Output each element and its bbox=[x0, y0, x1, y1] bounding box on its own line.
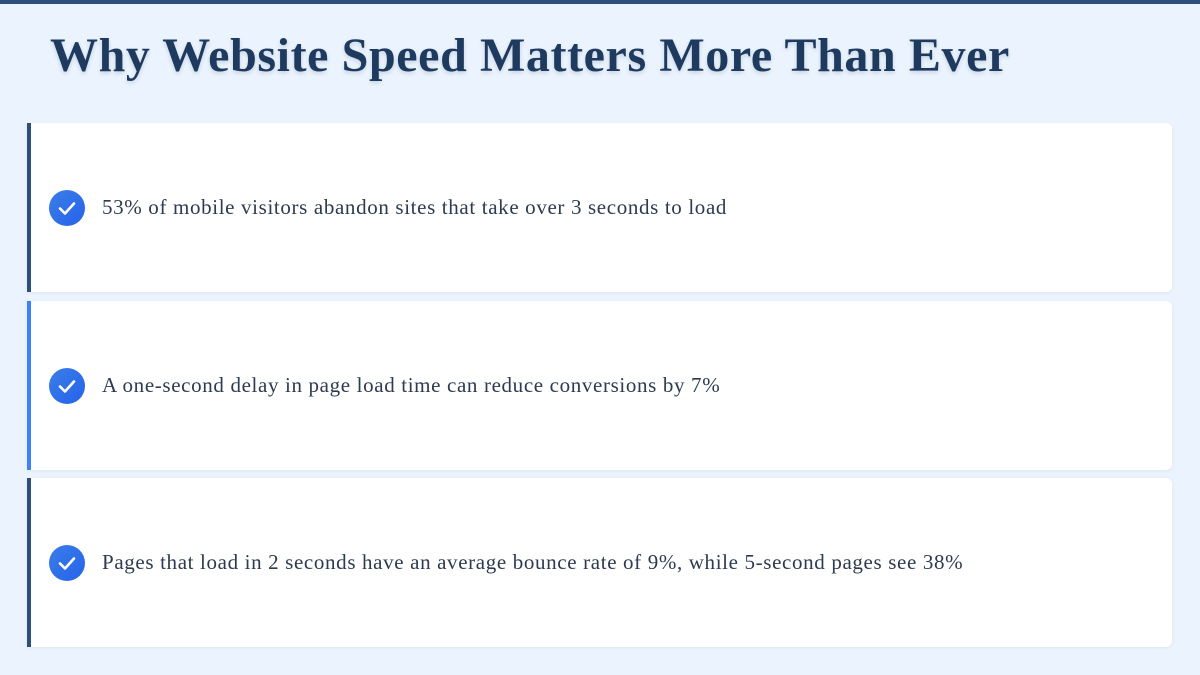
card: mobile abandonment bbox=[27, 123, 1172, 292]
icon: check bbox=[49, 190, 85, 226]
text: stat 2: A one-second delay in page load time can reduce conversions by 7% bbox=[102, 373, 720, 397]
text: stat 3: Pages that load in 2 seconds have an average bounce rate of 9%, while 5-second pages see 38% bbox=[102, 550, 963, 574]
icon: check bbox=[49, 368, 85, 404]
card: bounce rate bbox=[27, 478, 1172, 647]
title: Why Website Speed Matters More Than Ever bbox=[50, 29, 1010, 82]
icon: check bbox=[49, 545, 85, 581]
card: conversions bbox=[27, 301, 1172, 470]
text: stat 1: 53% of mobile visitors abandon sites that take over 3 seconds to load bbox=[102, 195, 727, 219]
